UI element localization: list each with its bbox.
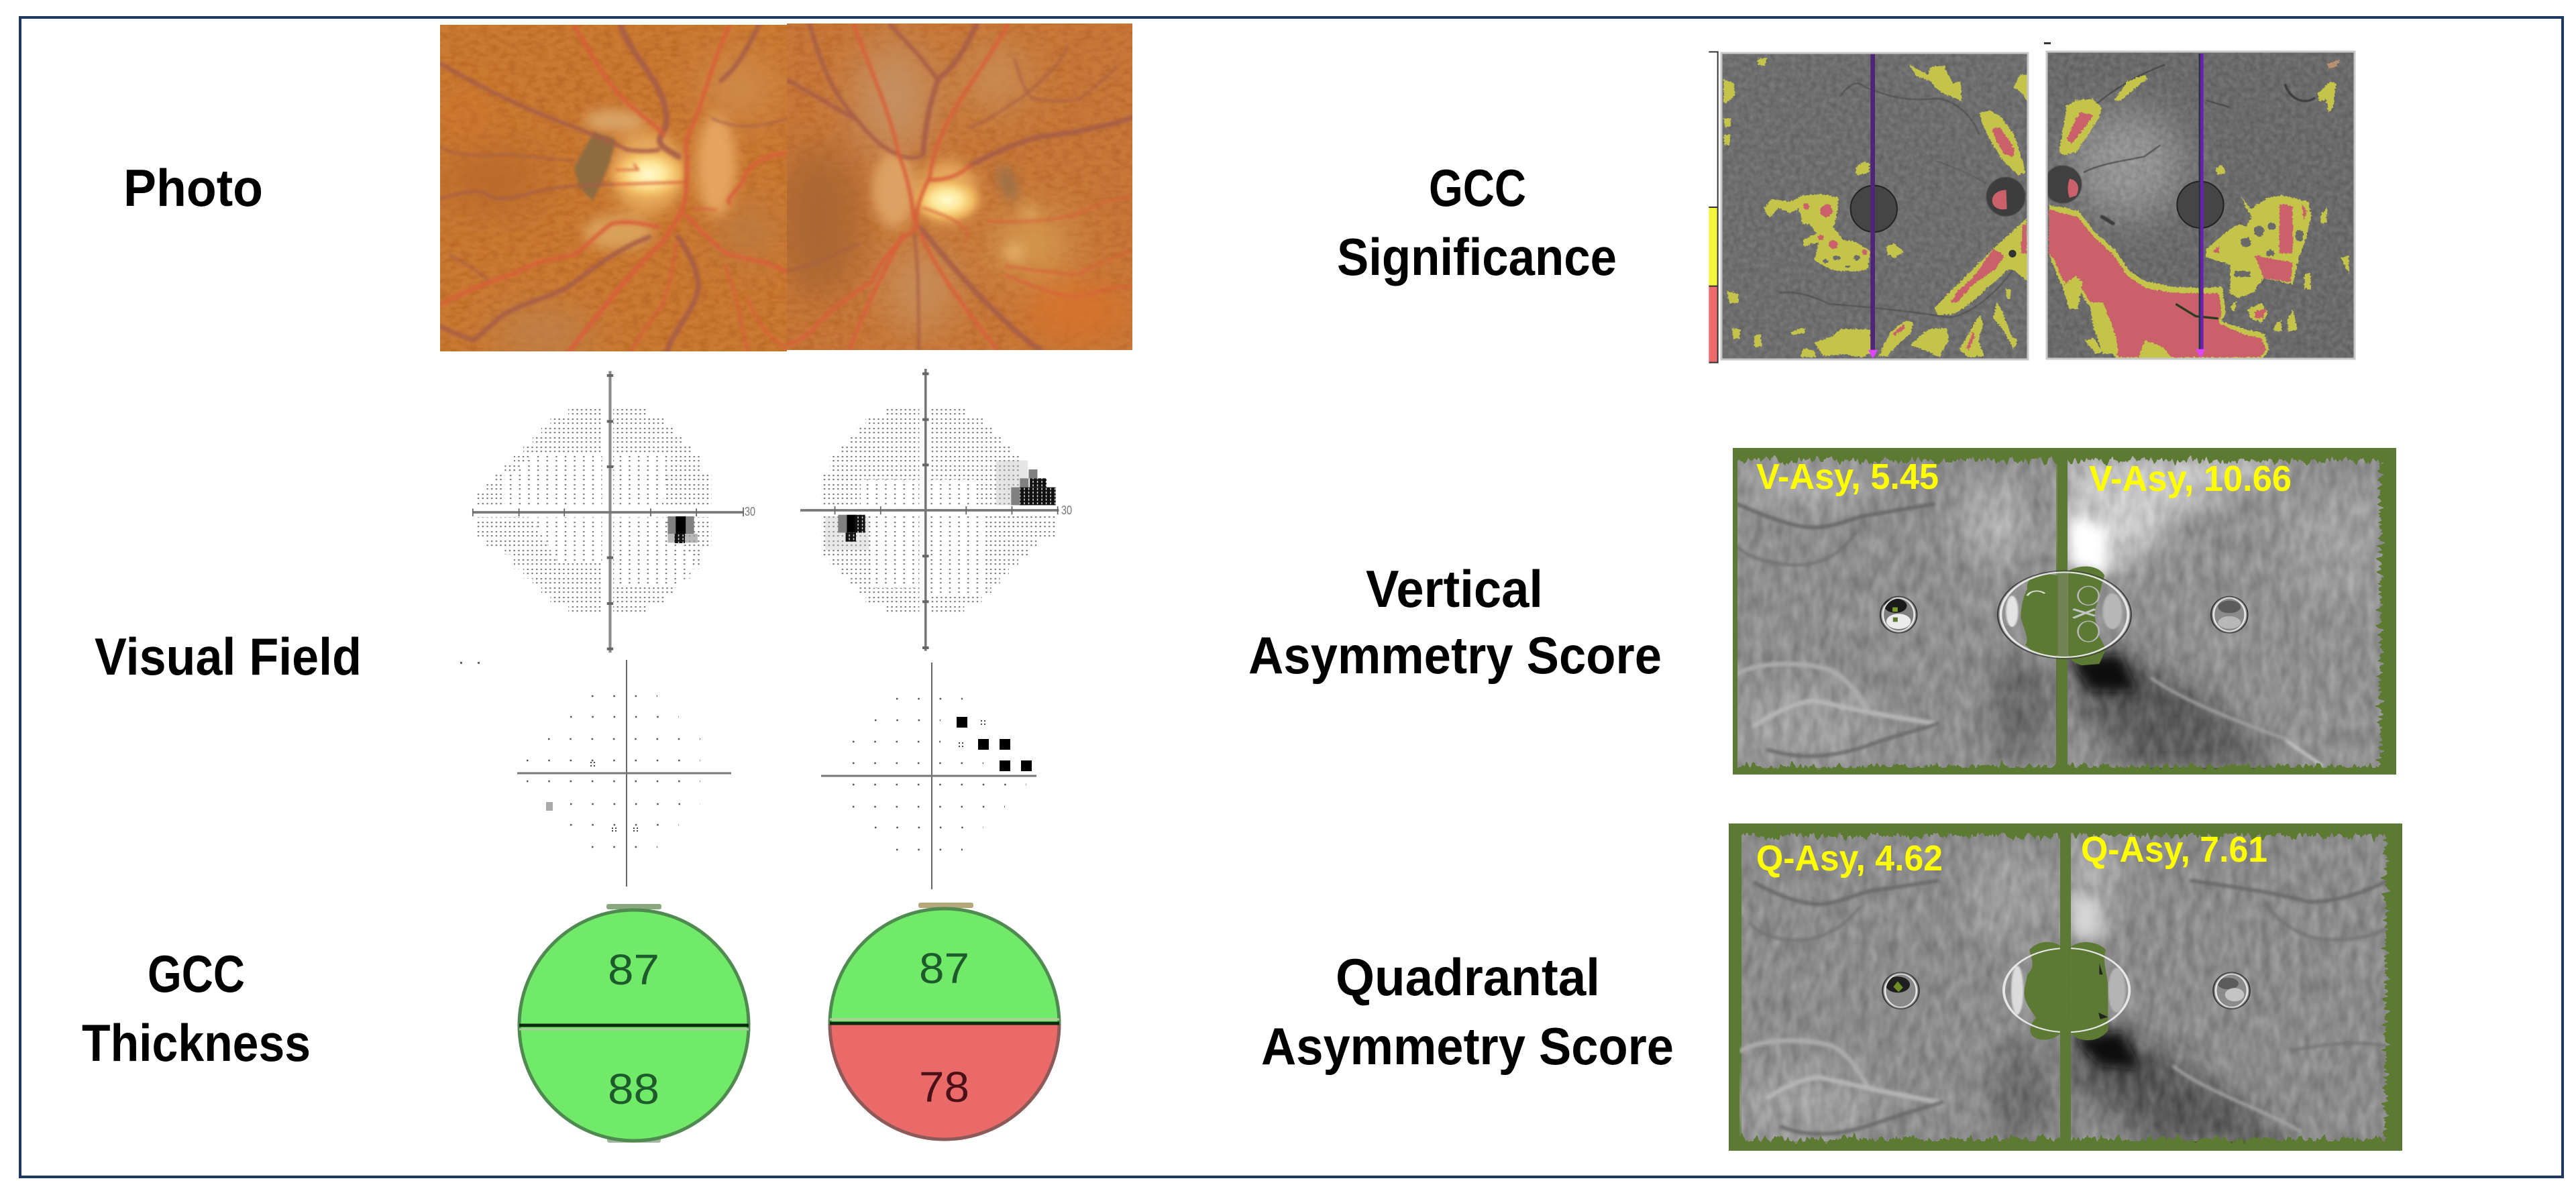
heading: Vertical Asymmetry Score: Asymmetry Score	[1248, 626, 1662, 685]
map: GCC significance right eye	[2044, 51, 2356, 359]
optic disc	[1998, 567, 2131, 665]
heading: Vertical Asymmetry Score	[1248, 559, 1662, 685]
heading: GCC Significance: Significance	[1337, 227, 1617, 286]
scotoma blocks	[825, 461, 1056, 550]
panel: fundus photo right eye	[776, 23, 1134, 350]
axis label: 30 left plot: 30	[745, 505, 755, 518]
score: V-Asy left: V-Asy, 5.45	[1756, 457, 1939, 497]
value upper: 87	[608, 946, 659, 994]
heading: GCC Thickness: Thickness	[82, 1013, 311, 1072]
heading: GCC Thickness	[82, 944, 311, 1072]
legend: significance colour bar	[1709, 52, 1718, 363]
heading: GCC Thickness: GCC	[148, 944, 245, 1003]
chart: GCC thickness dial right eye	[830, 903, 1059, 1139]
heading: Quadrantal Asymmetry Score: Asymmetry Score	[1261, 1017, 1674, 1076]
value lower: 78	[919, 1063, 969, 1111]
fovea mask	[1851, 186, 1897, 232]
heading: Quadrantal Asymmetry Score: Quadrantal	[1336, 948, 1600, 1007]
value lower: 88	[608, 1065, 659, 1113]
score: Q-Asy right: Q-Asy, 7.61	[2081, 830, 2267, 870]
value upper: 87	[919, 944, 969, 992]
chart: visual field grayscale left eye	[471, 371, 743, 652]
heading: Vertical Asymmetry Score: Vertical	[1366, 559, 1543, 618]
heading: GCC Significance	[1337, 158, 1617, 286]
panel: fundus photo left eye	[440, 25, 788, 353]
jagged mask edges	[1717, 815, 2415, 1156]
fovea left	[1882, 972, 1919, 1009]
fovea left	[1880, 596, 1917, 633]
dark crescent	[574, 132, 616, 201]
scan line with arrow	[2196, 54, 2205, 358]
optic disc	[1986, 177, 2025, 217]
fovea right	[2213, 972, 2250, 1009]
heading: GCC Significance: GCC	[1429, 158, 1526, 217]
jagged mask edges	[1717, 439, 2408, 783]
map: quadrantal asymmetry	[1717, 815, 2415, 1156]
chart: pattern deviation right eye	[821, 663, 1036, 889]
score: V-Asy right: V-Asy, 10.66	[2089, 459, 2292, 499]
chart: pattern deviation left eye	[460, 660, 731, 887]
optic disc	[2003, 942, 2130, 1041]
optic disc	[2044, 166, 2082, 203]
scotoma block	[667, 516, 698, 543]
map: GCC significance left eye	[1721, 52, 2029, 361]
panel edge right	[2047, 52, 2355, 359]
score: Q-Asy left: Q-Asy, 4.62	[1756, 838, 1943, 878]
panel edge left	[1721, 53, 2028, 359]
chart: GCC thickness dial left eye	[519, 904, 749, 1143]
black deviation squares	[957, 717, 1032, 771]
heading: Quadrantal Asymmetry Score	[1261, 948, 1674, 1076]
fovea mask	[2177, 182, 2224, 228]
chart: visual field grayscale right eye	[800, 369, 1059, 651]
scan line with arrow	[1868, 54, 1878, 359]
axis label: 30 right plot: 30	[1061, 504, 1072, 517]
small tick mark	[2044, 42, 2051, 44]
fovea right	[2211, 596, 2248, 633]
heading: Visual Field: Visual Field	[95, 627, 362, 686]
heading: Photo: Photo	[123, 158, 263, 217]
map: vertical asymmetry	[1717, 439, 2408, 783]
